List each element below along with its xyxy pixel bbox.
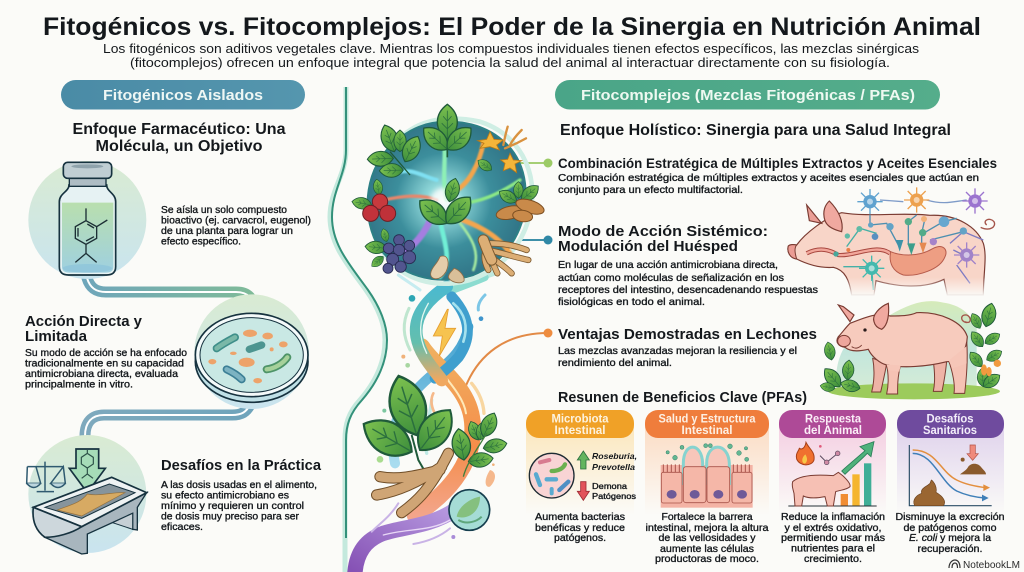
text: vial description [161,204,311,248]
card 2 text: productoras de moco. [655,553,759,565]
card 2 text: aumente las células [660,543,754,555]
title: Fitogénicos vs. Fitocomplejos: El Poder de la Sinergia en Nutrición Animal [43,13,981,41]
illustration: healthy piglet [819,301,1004,399]
text: acción directa: antimicrobiana directa, evaluada [25,368,178,380]
section: modo de acción: En lugar de una acción antimicrobiana directa, [558,259,778,271]
left pill header [61,80,305,110]
section: ventajas [558,327,817,369]
card 1 labels: Prevotella [592,462,635,472]
notebooklm logo: NotebookLM [963,559,1020,571]
card 1 text: benéficas y reduce [535,522,625,534]
text: desafíos: A las dosis usadas en el alimento, [161,479,317,491]
illustration: pig with signalling network [788,187,995,297]
card 3 icon: pig and growth bars [788,442,877,506]
card 1 labels: Roseburia, [592,451,637,461]
left heading [72,121,286,155]
section: ventajas: Las mezclas avanzadas mejoran la resiliencia y el [558,345,797,357]
card 2 header [645,410,769,438]
section: modo de acción [558,224,818,308]
text: desafíos: mínimo y requieren un control [161,500,304,512]
illustration: lower plant with root and orb [356,371,508,530]
section: modo de acción: fisiológicas en todo el animal. [558,296,705,308]
card: desafíos sanitarios [896,410,1005,555]
icon: feed trough with scale [27,435,147,554]
card 3 text: y el extrés oxidativo, [784,522,882,534]
card 1 icon: microbiome [529,451,589,500]
card 2 text: de las vellosidades y [658,532,756,544]
card: respuesta del animal [779,410,886,565]
section: modo de acción: Modo de Acción Sistémico: [558,224,768,240]
text: desafíos: su efecto antimicrobiano es [161,490,289,502]
heading: acción directa: Acción Directa y [25,314,142,330]
card 3 text: permitiendo usar más [781,532,885,544]
card 1 header: Microbiota [552,414,609,426]
card 2 header: Intestinal [682,425,732,437]
text: acción directa: principalmente in vitro. [25,378,133,390]
card 3 text: nutrientes para el [791,542,875,554]
right pill header: Fitocomplejos (Mezclas Fitogénicas / PFAs) [581,87,915,104]
panel: fitogénicos aislados [25,80,322,554]
connector lines [465,158,552,388]
section: combinación: Combinación estratégica de múltiples extractos y aceites esenciales que actúan en [558,172,979,184]
heading: resumen: Resunen de Beneficios Clave (PFAs) [558,390,807,406]
subtitle [103,42,919,70]
card 4 text [896,511,1005,555]
illustration: phytogenic sphere [351,104,546,284]
panel: fitocomplejos [526,80,1005,565]
heading: acción directa: Limitada [25,329,88,345]
subtitle: Los fitogénicos son aditivos vegetales clave. Mientras los compuestos individuales tienen efectos específicos, las mezclas sinérgicas [103,42,919,56]
text: acción directa: Su modo de acción se ha enfocado [25,347,187,359]
illustration: upper energy streams and lightning bolt [398,273,495,380]
text: vial description: bioactivo (ej. carvacrol, eugenol) [161,214,311,226]
card 4 text: de patógenos como [904,522,997,534]
curved divider [330,87,387,572]
text: acción directa [25,347,187,390]
heading: desafíos: Desafíos en la Práctica [161,458,322,474]
subtitle: (fitocomplejos) ofrecen un enfoque integral que potencia la salud del animal al interactuar directamente con su fisiología. [130,56,890,70]
section: modo de acción: Modulación del Huésped [558,239,738,255]
text: desafíos [161,479,317,533]
text: acción directa: tradicionalmente en su capacidad [25,358,184,370]
card 2 header: Salud y Estructura [658,414,756,426]
text: desafíos: eficaces. [161,521,203,533]
card 3 header: Respuesta [805,414,862,426]
pipe: vial to petri dish [87,278,254,322]
section: ventajas: rendimiento del animal. [558,357,672,369]
card 3 header [779,410,886,438]
section: modo de acción: actúan como moléculas de señalización en los [558,272,784,284]
card 1 labels [592,451,637,501]
text: vial description: de una planta para lograr un [161,225,293,237]
right heading: Enfoque Holístico: Sinergia para una Salud Integral [560,122,951,139]
card 4 text: Disminuye la excreción [896,511,1005,523]
card 1 labels: Demona [592,481,627,491]
card 1 text: Aumenta bacterias [535,511,625,523]
card: salud y estructura intestinal [645,410,769,565]
left pill header: Fitogénicos Aislados [103,88,263,104]
text: vial description: Se aísla un solo compuesto [161,204,287,216]
card 3 text [781,511,885,565]
card 2 icon: intestinal villi [661,444,753,508]
section: modo de acción: receptores del intestino, desencadenando respuestas [558,284,818,296]
card 2 text: Fortalece la barrera [662,511,753,523]
card 4 header: Desafíos [926,414,974,426]
card 4 header [897,410,1004,438]
card 1 labels: Patógenos [592,491,636,501]
card 4 icon: pathogen excretion chart [909,445,992,506]
section: combinación: conjunto para un efecto multifactorial. [558,184,743,196]
card 3 text: crecimiento. [804,553,862,565]
left heading: Enfoque Farmacéutico: Una [72,121,286,138]
card 3 text: Reduce la inflamación [781,511,885,523]
card 1 header [526,410,634,438]
heading: acción directa [25,314,142,345]
card 4 header: Sanitarios [923,425,977,437]
card 2 text [646,511,769,565]
card 1 header: Intestinal [554,425,606,437]
icon: petri dish [194,294,309,409]
card: microbiota intestinal [526,410,637,544]
right pill header [555,80,940,110]
section: combinación [558,155,997,196]
left heading: Molécula, un Objetivo [96,138,263,155]
section: ventajas: Ventajas Demostradas en Lechones [558,327,817,343]
section: combinación: Combinación Estratégica de Múltiples Extractos y Aceites Esenciales [558,155,997,171]
text: desafíos: de dosis muy preciso para ser [161,510,299,522]
card 3 header: del Animal [804,425,862,437]
pipe: petri dish to trough [85,405,250,448]
card 2 text: intestinal, mejora la altura [646,522,769,534]
card 1 text [535,511,625,544]
text: vial description: efecto específico. [161,236,241,248]
card 4 text: E. coli y mejora la [909,532,991,544]
icon: vial with molecule [28,161,146,279]
card 4 text: recuperación. [918,543,982,555]
card 1 text: patógenos. [554,532,606,544]
illustration: lower energy streams [355,327,495,572]
